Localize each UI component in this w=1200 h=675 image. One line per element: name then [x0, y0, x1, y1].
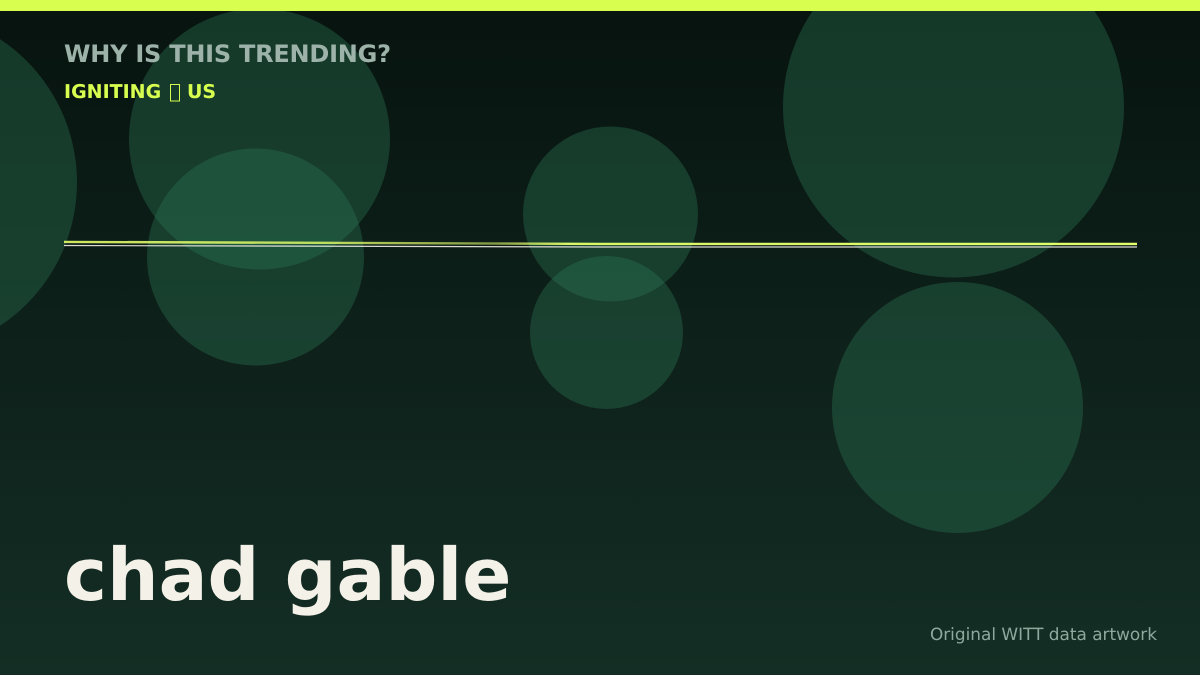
- bubble: upper right: [783, 0, 1124, 278]
- bubble: lower right: [832, 282, 1083, 533]
- footer credit: Original WITT data artwork: [930, 624, 1157, 644]
- trend line: pale: [64, 246, 1137, 247]
- top accent bar: [0, 0, 1200, 11]
- eyebrow heading: WHY IS THIS TRENDING?: [64, 40, 391, 68]
- bubble: upper centre: [523, 126, 698, 302]
- bubble: upper left: [129, 8, 390, 270]
- bubble: far left: [0, 10, 77, 354]
- trend line: lime: [64, 242, 1137, 244]
- trend lines: [64, 242, 1137, 247]
- status label: [64, 81, 216, 103]
- icon: missing-glyph box standing in for the flame: [170, 84, 182, 101]
- status label: US: [187, 81, 216, 103]
- bubble cluster: [0, 0, 1124, 533]
- bubble: lower left: [147, 148, 364, 366]
- status label: IGNITING: [64, 81, 161, 103]
- bubble: lower centre: [530, 256, 683, 409]
- main title: chad gable: [64, 534, 511, 618]
